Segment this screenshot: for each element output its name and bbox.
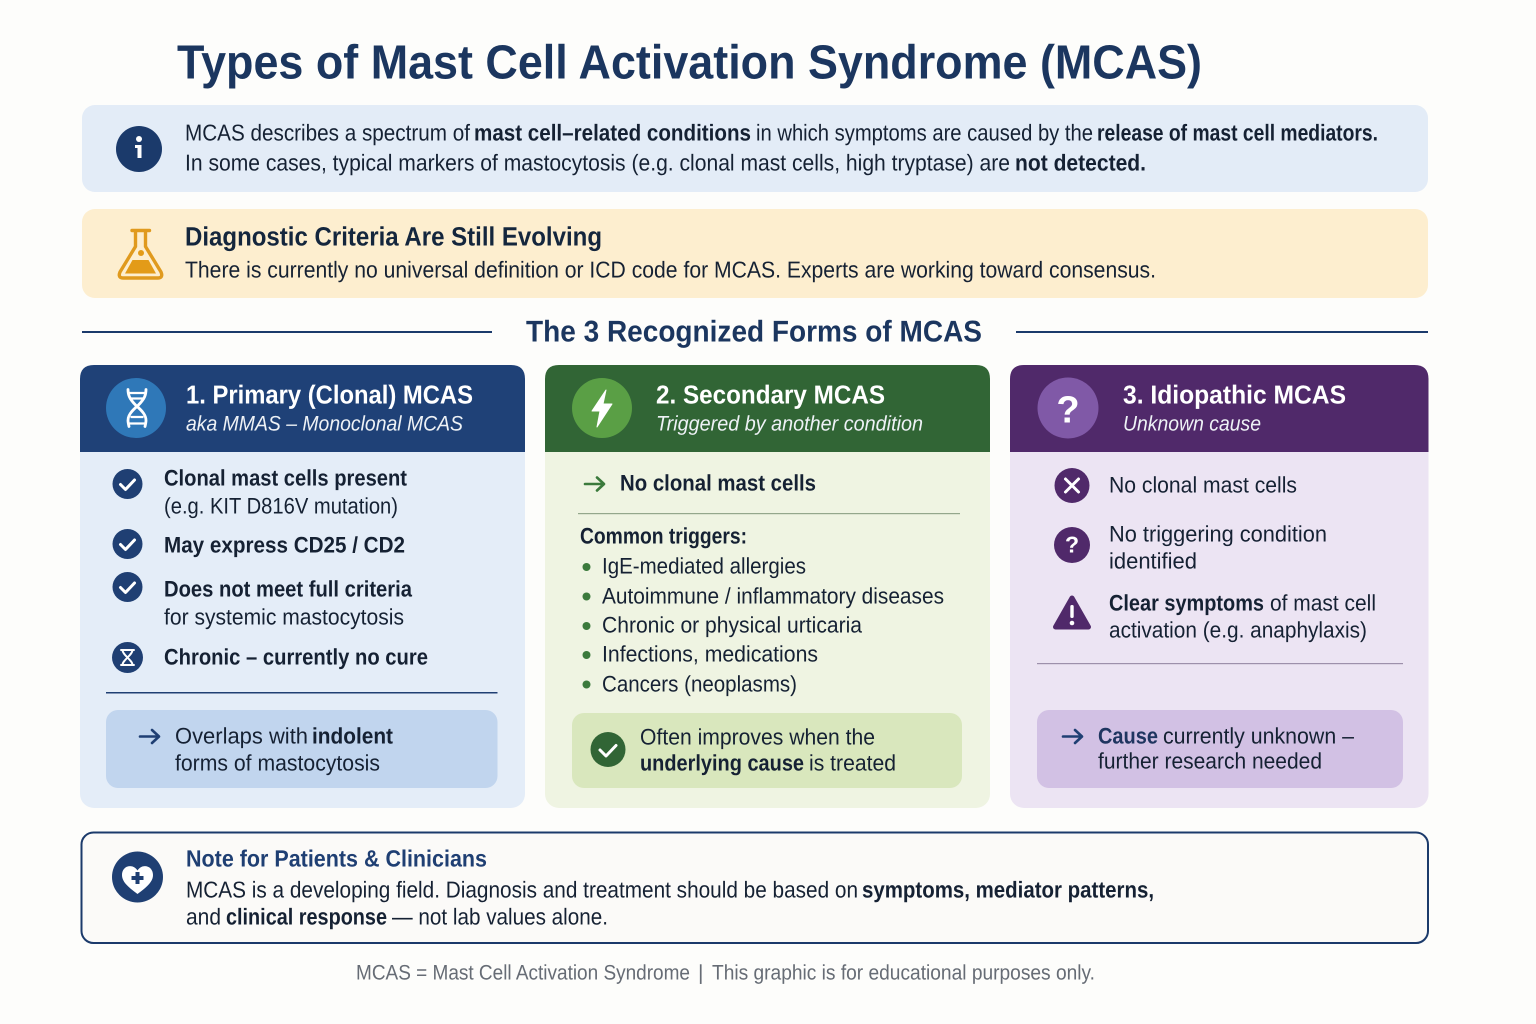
item: clonal cells: (e.g. KIT D816V mutation) [164, 493, 398, 518]
panel: diagnostic criteria [82, 209, 1428, 298]
callout: unknown cause: further research needed [1098, 748, 1322, 773]
item: CD25 [112, 529, 405, 559]
item: no trigger: ? [1065, 531, 1079, 557]
item: clonal cells: Clonal mast cells present [164, 465, 407, 490]
callout: unknown cause: currently unknown – [1163, 723, 1354, 748]
diagnostic text: There is currently no universal definition or ICD code for MCAS. Experts are working toward consensus. [185, 256, 1156, 282]
header: primary [80, 365, 525, 452]
note text: and [186, 903, 221, 929]
title: Types of Mast Cell Activation Syndrome (MCAS) [177, 36, 1202, 89]
icon: DNA [106, 378, 166, 438]
intro text: mast cell–related conditions [474, 119, 751, 145]
item: chronic: Chronic – currently no cure [164, 644, 428, 669]
item: criteria: Does not meet full criteria [164, 576, 412, 601]
item: no trigger: No triggering condition [1109, 521, 1327, 546]
callout: improves: underlying cause [640, 750, 804, 775]
header: secondary [545, 365, 990, 452]
item: clear symptoms: activation (e.g. anaphylaxis) [1109, 617, 1367, 642]
triggers list: Autoimmune / inflammatory diseases [602, 583, 944, 608]
icon: lightning bolt [572, 378, 632, 438]
panel: primary MCAS [80, 365, 525, 808]
callout: improves: is treated [809, 750, 896, 775]
callout: unknown cause [1037, 710, 1403, 788]
note text: — not lab values alone. [392, 903, 608, 929]
item: clear symptoms: Clear symptoms [1109, 590, 1264, 615]
panel: secondary MCAS [545, 365, 990, 808]
callout: improves: Often improves when the [640, 724, 875, 749]
item: clonal cells [112, 465, 407, 518]
arrow [585, 478, 604, 490]
callout: improves [572, 713, 962, 788]
panel: idiopathic MCAS [1010, 365, 1428, 808]
icon: check [590, 732, 626, 767]
item: no trigger: identified [1109, 548, 1197, 573]
header: primary: 1. Primary (Clonal) MCAS [186, 379, 473, 409]
item: criteria [112, 572, 412, 629]
note heading: Note for Patients & Clinicians [186, 845, 487, 871]
triggers list: IgE-mediated allergies [602, 553, 806, 578]
item: chronic [112, 642, 428, 673]
intro text: release of mast cell mediators. [1097, 119, 1378, 145]
icon: flask [119, 230, 162, 278]
header: idiopathic [1010, 365, 1428, 452]
item: no clonal cells: No clonal mast cells [1109, 472, 1297, 497]
diagnostic heading: Diagnostic Criteria Are Still Evolving [185, 221, 602, 251]
panel: note for patients and clinicians [82, 832, 1428, 943]
arrow [1063, 730, 1082, 743]
item: clear symptoms [1056, 590, 1376, 642]
triggers list: Infections, medications [602, 641, 818, 666]
callout: unknown cause: Cause [1098, 723, 1158, 748]
triggers list: Common triggers: [580, 523, 747, 548]
footer: MCAS = Mast Cell Activation Syndrome [356, 961, 690, 984]
note text: symptoms, mediator patterns, [862, 876, 1154, 902]
header: secondary: Triggered by another condition [656, 412, 923, 435]
icon: question: ? [1056, 389, 1080, 431]
item: clear symptoms: of mast cell [1270, 590, 1376, 615]
item: no clonal cells [1054, 468, 1297, 503]
item: CD25: May express CD25 / CD2 [164, 532, 405, 557]
intro text: not detected. [1015, 149, 1146, 175]
header: secondary: 2. Secondary MCAS [656, 379, 885, 409]
note text [186, 876, 1154, 929]
statement: no clonal cells: No clonal mast cells [620, 470, 816, 495]
section heading: The 3 Recognized Forms of MCAS [526, 315, 982, 348]
header: primary: aka MMAS – Monoclonal MCAS [186, 412, 463, 435]
icon: info [116, 126, 162, 172]
icon: question [1038, 378, 1098, 438]
footer: This graphic is for educational purposes only. [712, 961, 1095, 984]
callout: overlap: Overlaps with [175, 723, 308, 748]
triggers list: Chronic or physical urticaria [602, 612, 862, 637]
footer: | [698, 961, 703, 984]
intro text [185, 119, 1378, 175]
intro text: MCAS describes a spectrum of [185, 119, 471, 145]
icon: heart with cross [112, 852, 163, 902]
triggers list [580, 523, 944, 696]
item: no trigger [1054, 521, 1327, 573]
note text: clinical response [226, 903, 387, 929]
intro text: In some cases, typical markers of mastocytosis (e.g. clonal mast cells, high tryptase) are [185, 149, 1010, 175]
panel: intro information [82, 105, 1428, 192]
footer [356, 961, 1095, 984]
item: criteria: for systemic mastocytosis [164, 604, 404, 629]
intro text: in which symptoms are caused by the [756, 119, 1093, 145]
triggers list: Cancers (neoplasms) [602, 671, 797, 696]
header: idiopathic: Unknown cause [1123, 412, 1261, 435]
callout: overlap [106, 710, 498, 788]
arrow [140, 730, 159, 743]
callout: overlap: forms of mastocytosis [175, 750, 380, 775]
callout: overlap: indolent [312, 723, 393, 748]
header: idiopathic: 3. Idiopathic MCAS [1123, 379, 1346, 409]
note text: MCAS is a developing field. Diagnosis and treatment should be based on [186, 876, 858, 902]
